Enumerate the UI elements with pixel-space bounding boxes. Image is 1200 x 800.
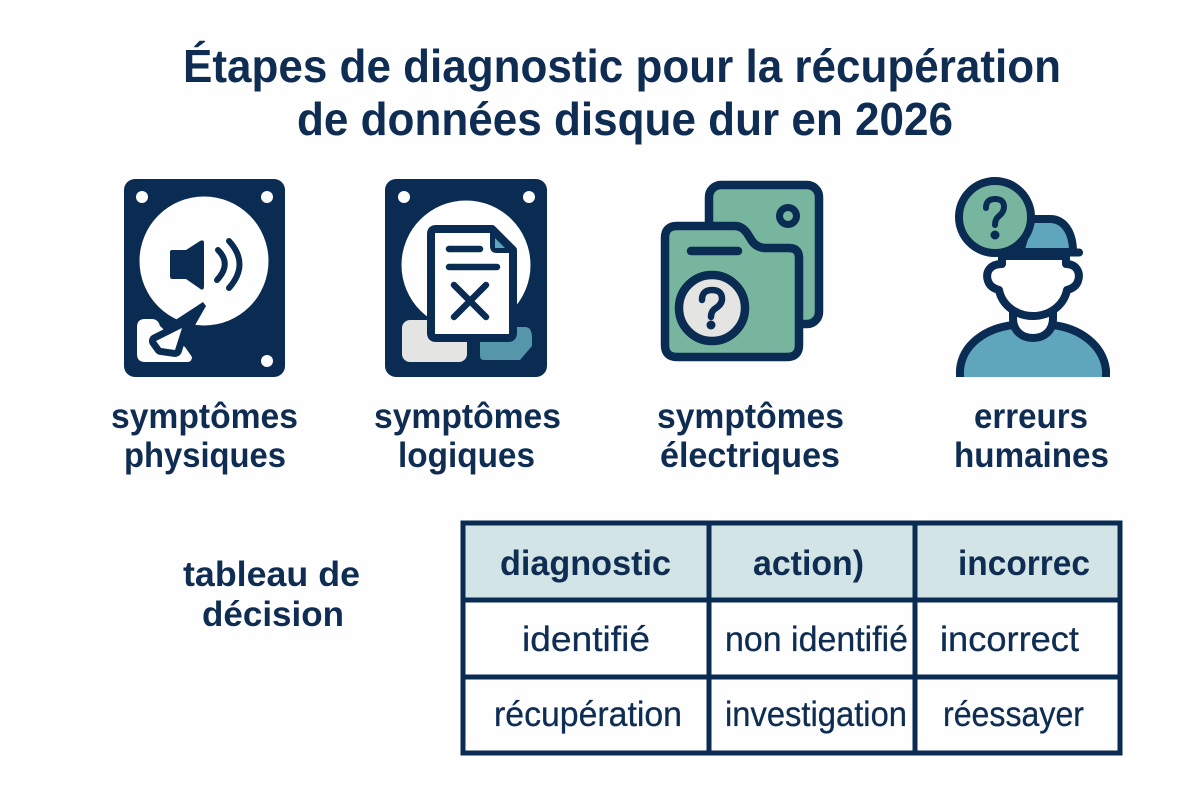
heading: tableau de décision: décision xyxy=(202,595,344,634)
row: action xyxy=(494,695,1084,734)
label: symptômes électriques xyxy=(657,397,844,475)
decision table xyxy=(463,523,1120,753)
icon: hard drive with speaker (physical symptoms) xyxy=(124,179,285,377)
icon: person with cap and question bubble (human errors) xyxy=(959,181,1106,377)
label: erreurs humaines xyxy=(954,397,1109,475)
label: symptômes logiques xyxy=(374,397,561,475)
row: status: incorrect xyxy=(940,620,1079,659)
label: erreurs humaines: erreurs xyxy=(974,397,1088,436)
title: Étapes de diagnostic pour la récupération xyxy=(183,40,1061,92)
label: symptômes logiques: logiques xyxy=(398,436,535,475)
label: erreurs humaines: humaines xyxy=(954,436,1109,475)
header row xyxy=(500,544,1090,583)
heading: tableau de décision xyxy=(183,555,360,634)
heading: tableau de décision: tableau de xyxy=(183,555,360,594)
header row: incorrec xyxy=(958,544,1090,583)
header row: action) xyxy=(753,544,864,583)
row: action: réessayer xyxy=(943,695,1084,734)
label: symptômes physiques: symptômes xyxy=(111,397,298,436)
row: action: récupération xyxy=(494,695,682,734)
label: symptômes physiques: physiques xyxy=(124,436,286,475)
row: status: non identifié xyxy=(725,620,908,659)
label: symptômes électriques: électriques xyxy=(660,436,840,475)
label: symptômes physiques xyxy=(111,397,298,475)
title: de données disque dur en 2026 xyxy=(297,93,953,145)
icon: folders with question mark (electrical symptoms) xyxy=(665,185,819,357)
row: status xyxy=(522,620,1079,659)
title xyxy=(183,40,1061,145)
label: symptômes logiques: symptômes xyxy=(374,397,561,436)
icon: hard drive with corrupted document (logical symptoms) xyxy=(385,179,547,377)
header row: diagnostic xyxy=(500,544,671,583)
row: action: investigation xyxy=(725,695,907,734)
label: symptômes électriques: symptômes xyxy=(657,397,844,436)
row: status: identifié xyxy=(522,620,650,659)
